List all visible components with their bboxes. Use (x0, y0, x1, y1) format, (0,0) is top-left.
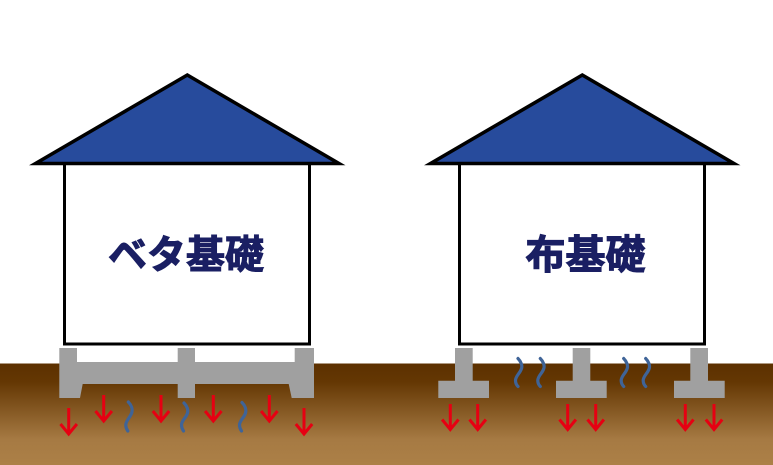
moisture waves: strip foundation (516, 358, 650, 386)
house: mat foundation (36, 75, 339, 344)
ground (0, 364, 773, 465)
roof (36, 75, 339, 164)
settlement arrows: mat foundation (60, 395, 312, 434)
house wall (64, 163, 310, 344)
mat foundation concrete (59, 348, 314, 398)
house: strip foundation (430, 75, 734, 344)
strip foundation concrete (438, 348, 725, 398)
house wall (460, 163, 704, 344)
roof (430, 75, 734, 164)
settlement arrows: strip foundation (442, 404, 722, 430)
label: strip foundation: 布基礎 (526, 234, 646, 278)
label: mat foundation: ベタ基礎 (108, 234, 264, 278)
moisture waves: mat foundation (126, 402, 246, 431)
